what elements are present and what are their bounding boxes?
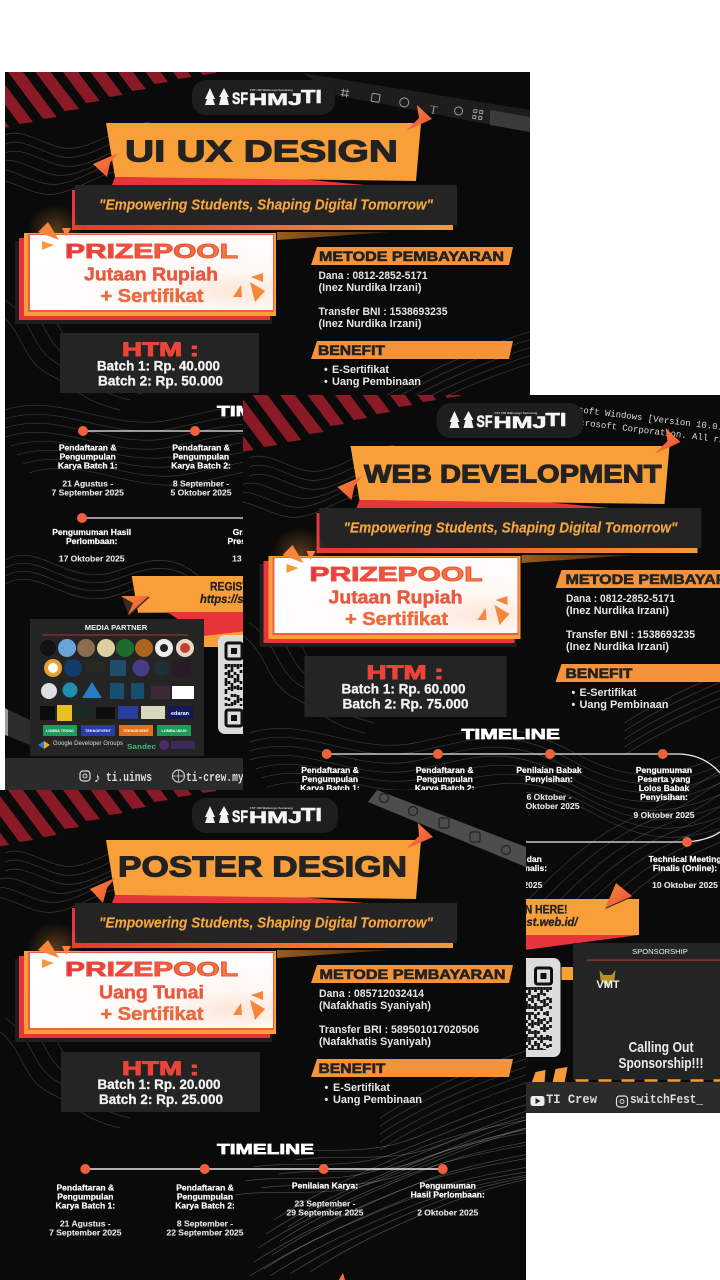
footer bar bbox=[526, 1082, 720, 1113]
logo pill: TI bbox=[546, 410, 566, 430]
benefit: Uang Pembinaan bbox=[333, 1094, 422, 1106]
timeline: Karya Batch 2: bbox=[175, 1201, 235, 1211]
benefit: • bbox=[572, 699, 576, 711]
HTM panel bbox=[304, 656, 506, 717]
media partner panel: TEKNOEVENT bbox=[123, 729, 150, 733]
registration banner bbox=[121, 576, 243, 647]
media partner panel: TEKNOEVENT bbox=[85, 729, 112, 733]
media partner panel bbox=[30, 619, 204, 756]
title banner: UI UX DESIGN bbox=[125, 134, 398, 168]
timeline: TIMELINE bbox=[217, 1141, 314, 1158]
HTM panel: HTM : bbox=[122, 1059, 199, 1080]
timeline: Perlombaan: bbox=[66, 536, 118, 546]
timeline: Penilaian Babak bbox=[516, 765, 582, 775]
benefit bbox=[311, 1059, 513, 1106]
prizepool card bbox=[15, 204, 276, 324]
HTM panel: Batch 1: Rp. 60.000 bbox=[342, 682, 466, 697]
timeline bbox=[49, 1141, 485, 1238]
timeline: Technical Meeting bbox=[648, 854, 720, 864]
orange corner tabs bbox=[532, 1067, 568, 1083]
timeline: Karya Batch 1: bbox=[300, 783, 360, 793]
timeline: 8 September - bbox=[177, 1219, 233, 1229]
benefit: • bbox=[324, 1094, 328, 1106]
title banner bbox=[338, 428, 680, 508]
timeline: Pengumpulan bbox=[173, 452, 229, 462]
registration banner bbox=[526, 883, 639, 980]
poster: UI UX Design bbox=[5, 72, 530, 790]
benefit: BENEFIT bbox=[318, 342, 386, 358]
design tool toolbar bbox=[303, 73, 530, 132]
timeline: Karya Batch 2: bbox=[171, 461, 231, 471]
benefit: Uang Pembinaan bbox=[332, 376, 421, 388]
prizepool card: + Sertifikat bbox=[100, 1003, 204, 1024]
timeline: Pendaftaran & bbox=[56, 1183, 114, 1193]
HTM panel: Batch 1: Rp. 40.000 bbox=[97, 359, 220, 374]
payment method: Dana : 0812-2852-5171 bbox=[566, 593, 675, 605]
footer bar: TI Crew bbox=[546, 1092, 597, 1107]
QR code bbox=[218, 635, 243, 734]
media partner panel: Google Developer Groups bbox=[53, 741, 123, 747]
timeline: Hasil Perlombaan: bbox=[411, 1190, 485, 1200]
logo pill: TI bbox=[301, 805, 322, 825]
payment method: (Inez Nurdika Irzani) bbox=[318, 318, 422, 330]
logo pill: FST UIN Walisongo Semarang bbox=[250, 806, 293, 810]
sponsorship panel: SPONSORSHIP bbox=[632, 947, 688, 956]
payment method bbox=[311, 965, 513, 1048]
media partner panel: LOMBA TEKNO bbox=[46, 729, 74, 733]
timeline: Karya Batch 1: bbox=[56, 1201, 115, 1211]
cut-off arrow tip bbox=[339, 1273, 345, 1280]
registration banner: https://switchfest.web.id/ bbox=[444, 915, 579, 929]
timeline: 10 Oktober 2025 bbox=[652, 880, 718, 890]
media partner panel: Sandec bbox=[127, 744, 156, 751]
benefit: E-Sertifikat bbox=[333, 1082, 390, 1094]
payment method: Dana : 0812-2852-5171 bbox=[318, 270, 428, 282]
tagline bar: "Empowering Students, Shaping Digital Tomorrow" bbox=[99, 916, 434, 932]
timeline: Grand Final dan bbox=[233, 527, 297, 537]
timeline: Presentasi Finalis: bbox=[227, 536, 303, 546]
terminal text bbox=[580, 408, 720, 442]
media partner panel: MEDIA PARTNER bbox=[85, 623, 148, 632]
timeline: 22 September 2025 bbox=[166, 1228, 244, 1238]
payment method bbox=[556, 570, 720, 653]
benefit: E-Sertifikat bbox=[580, 687, 637, 699]
poster: Web Development bbox=[198, 395, 720, 1114]
prizepool card bbox=[260, 527, 520, 647]
title banner: POSTER DESIGN bbox=[118, 852, 407, 884]
tagline bar: "Empowering Students, Shaping Digital Tomorrow" bbox=[344, 520, 679, 536]
payment method: Transfer BNI : 1538693235 bbox=[566, 629, 695, 641]
timeline: 23 September - bbox=[295, 1199, 356, 1209]
timeline: Presentasi Finalis: bbox=[472, 863, 547, 873]
timeline: 29 September 2025 bbox=[286, 1208, 364, 1218]
timeline: 21 Agustus - bbox=[62, 479, 113, 489]
tagline bar: "Empowering Students, Shaping Digital Tomorrow" bbox=[99, 198, 434, 214]
logo pill bbox=[192, 798, 338, 833]
timeline: Grand Final dan bbox=[477, 854, 542, 864]
footer bar bbox=[5, 758, 243, 790]
timeline: Pengumpulan bbox=[177, 1192, 233, 1202]
prizepool card bbox=[15, 922, 276, 1042]
tagline bar bbox=[72, 185, 457, 240]
timeline: 9 Oktober 2025 bbox=[634, 810, 695, 820]
HTM panel: Batch 2: Rp. 75.000 bbox=[342, 697, 468, 712]
timeline: Pengumpulan bbox=[417, 774, 473, 784]
timeline: 7 September 2025 bbox=[49, 1228, 122, 1238]
sponsorship panel: VMT bbox=[596, 979, 620, 991]
prizepool card: Uang Tunai bbox=[99, 982, 204, 1002]
timeline: Pengumuman bbox=[420, 1181, 476, 1191]
prizepool card: + Sertifikat bbox=[100, 285, 204, 306]
HTM panel bbox=[60, 333, 259, 393]
prizepool card: PRIZEPOOL bbox=[65, 241, 238, 263]
footer bar: ti.uinws bbox=[106, 770, 152, 785]
timeline: 21 Agustus - bbox=[60, 1219, 111, 1229]
payment method: Dana : 085712032414 bbox=[319, 988, 424, 1000]
prizepool card: + Sertifikat bbox=[345, 608, 448, 629]
HTM panel: HTM : bbox=[366, 663, 444, 684]
floating toolbar bbox=[368, 790, 526, 867]
payment method: METODE PEMBAYARAN bbox=[319, 248, 504, 264]
sponsorship panel bbox=[573, 943, 720, 1080]
logo pill: SF bbox=[476, 412, 492, 431]
logo pill bbox=[436, 403, 584, 438]
prizepool card: Jutaan Rupiah bbox=[328, 586, 462, 608]
footer bar: switchFest_ bbox=[630, 1092, 703, 1107]
payment method: (Inez Nurdika Irzani) bbox=[566, 605, 669, 617]
tagline bar bbox=[316, 508, 702, 563]
HTM panel bbox=[61, 1052, 260, 1112]
prizepool card: PRIZEPOOL bbox=[65, 959, 238, 981]
benefit: BENEFIT bbox=[318, 1060, 386, 1076]
prizepool card: PRIZEPOOL bbox=[310, 564, 482, 586]
logo pill bbox=[192, 80, 335, 115]
HTM panel: Batch 1: Rp. 20.000 bbox=[98, 1077, 220, 1092]
timeline: Pengumuman Hasil bbox=[52, 527, 131, 537]
timeline: 13 Oktober 2025 bbox=[477, 880, 543, 890]
topographic contours bbox=[235, 1095, 526, 1276]
timeline: Pendaftaran & bbox=[172, 443, 230, 453]
HTM panel: HTM : bbox=[122, 340, 199, 361]
payment method: (Nafakhatis Syaniyah) bbox=[319, 1000, 431, 1012]
timeline: Pendaftaran & bbox=[59, 443, 117, 453]
timeline: TIMELINE bbox=[462, 726, 560, 743]
timeline: 5 Oktober 2025 bbox=[171, 488, 232, 498]
logo pill: FST UIN Walisongo Semarang bbox=[250, 88, 293, 92]
footer bar: ti-crew.my.id bbox=[186, 770, 261, 785]
design tool toolbar: T bbox=[429, 102, 439, 117]
timeline: Pengumpulan bbox=[57, 1192, 113, 1202]
logo pill: HMJ bbox=[494, 413, 546, 432]
timeline: Karya Batch 1: bbox=[58, 461, 118, 471]
footer bar: ♪ bbox=[94, 770, 100, 785]
timeline bbox=[52, 406, 243, 562]
benefit: BENEFIT bbox=[566, 665, 633, 681]
timeline: 6 Oktober - bbox=[527, 792, 572, 802]
timeline: 7 September 2025 bbox=[52, 488, 124, 498]
payment method: Transfer BNI : 1538693235 bbox=[318, 306, 448, 318]
benefit: E-Sertifikat bbox=[332, 364, 389, 376]
HTM panel: Batch 2: Rp. 25.000 bbox=[99, 1092, 223, 1107]
benefit bbox=[556, 664, 720, 711]
benefit: • bbox=[324, 1082, 328, 1094]
registration banner: REGISTRATION HERE! bbox=[454, 905, 568, 917]
left tool fragment bbox=[5, 708, 30, 745]
HTM panel: Batch 2: Rp. 50.000 bbox=[98, 374, 223, 389]
payment method: Transfer BRI : 589501017020506 bbox=[319, 1024, 479, 1036]
timeline: Penilaian Karya: bbox=[292, 1181, 358, 1191]
timeline: 2 Oktober 2025 bbox=[417, 1208, 478, 1218]
logo pill: FST UIN Walisongo Semarang bbox=[494, 411, 538, 415]
timeline: Pendaftaran & bbox=[301, 765, 359, 775]
logo pill: TI bbox=[301, 87, 322, 107]
timeline: Pendaftaran & bbox=[176, 1183, 234, 1193]
media partner panel: edaran bbox=[171, 711, 190, 717]
benefit bbox=[311, 341, 513, 388]
sponsorship panel: Calling Out bbox=[628, 1039, 694, 1056]
payment method: (Inez Nurdika Irzani) bbox=[566, 641, 669, 653]
timeline: 17 Oktober 2025 bbox=[59, 554, 125, 564]
title banner: WEB DEVELOPMENT bbox=[364, 460, 662, 488]
logo pill: SF bbox=[232, 89, 248, 108]
timeline: Karya Batch 2: bbox=[415, 783, 475, 793]
title banner bbox=[93, 105, 432, 185]
payment method: (Nafakhatis Syaniyah) bbox=[319, 1036, 431, 1048]
timeline: Pengumpulan bbox=[302, 774, 358, 784]
timeline: Pengumpulan bbox=[60, 452, 116, 462]
timeline: Lolos Babak bbox=[639, 783, 690, 793]
timeline: Pengumuman bbox=[636, 765, 692, 775]
timeline: Penyisihan: bbox=[525, 774, 573, 784]
media partner panel: LOMBA UI/UX bbox=[162, 729, 187, 733]
benefit: • bbox=[324, 364, 328, 376]
timeline: Pendaftaran & bbox=[416, 765, 474, 775]
logo pill: HMJ bbox=[249, 808, 302, 827]
timeline: TIMELINE bbox=[217, 403, 315, 420]
title banner bbox=[90, 823, 433, 903]
registration banner: REGISTRATION HERE! bbox=[210, 582, 323, 594]
benefit: Uang Pembinaan bbox=[580, 699, 668, 711]
payment method: (Inez Nurdika Irzani) bbox=[318, 282, 422, 294]
benefit: • bbox=[572, 687, 576, 699]
timeline: Penyisihan: bbox=[640, 792, 688, 802]
payment method: METODE PEMBAYARAN bbox=[320, 966, 506, 982]
tagline bar bbox=[72, 903, 457, 958]
timeline: Peserta yang bbox=[638, 774, 690, 784]
poster: Poster Design bbox=[0, 790, 526, 1280]
payment method bbox=[311, 247, 513, 330]
benefit: • bbox=[324, 376, 328, 388]
logo pill: HMJ bbox=[249, 90, 302, 109]
timeline: Finalis (Online): bbox=[653, 863, 717, 873]
timeline: 8 September - bbox=[173, 479, 229, 489]
logo pill: SF bbox=[232, 807, 248, 826]
registration banner: https://switchfest.web.id/ bbox=[200, 592, 335, 606]
timeline bbox=[300, 726, 720, 890]
timeline: 13 Oktober 2025 bbox=[232, 554, 298, 564]
QR code bbox=[526, 958, 560, 1057]
prizepool card: Jutaan Rupiah bbox=[84, 264, 218, 284]
timeline: 8 Oktober 2025 bbox=[519, 801, 580, 811]
red hazard stripes bbox=[0, 72, 216, 129]
